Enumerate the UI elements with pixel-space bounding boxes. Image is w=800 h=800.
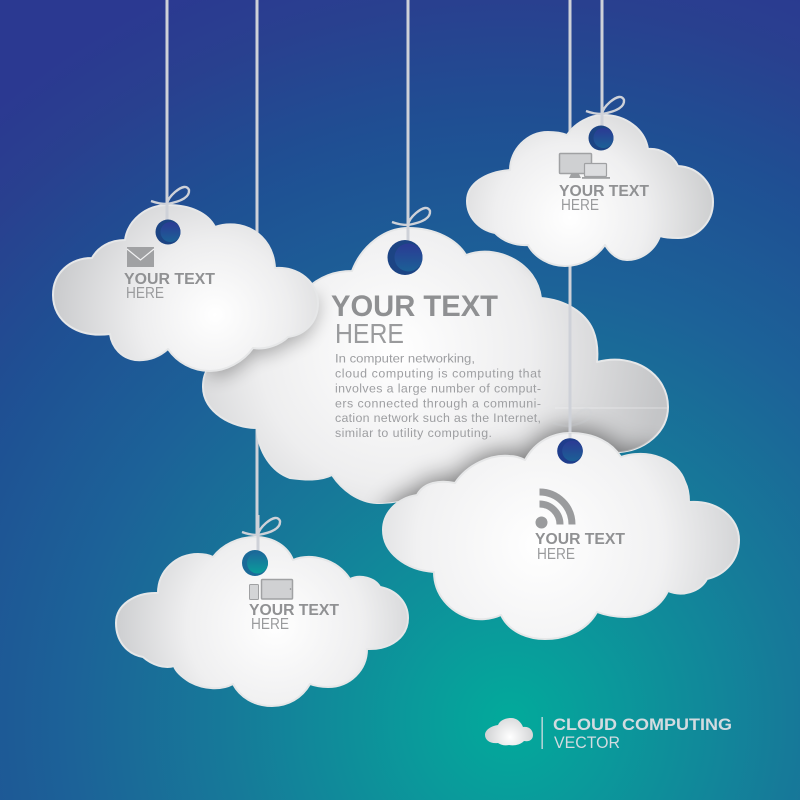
faint bow behind wifi cloud <box>553 409 591 426</box>
mobile cloud heading: YOUR TEXT <box>249 602 339 619</box>
logo: cloud computing vector <box>485 715 732 752</box>
icon: small logo cloud <box>485 718 533 745</box>
mail cloud hole <box>156 220 180 244</box>
mail cloud bow <box>151 187 189 204</box>
central cloud string <box>406 0 410 240</box>
logo subtitle: VECTOR <box>554 733 620 752</box>
panel: top-left mail cloud <box>53 0 318 371</box>
central subheading: HERE <box>335 318 404 349</box>
devices cloud string <box>600 0 604 128</box>
mobile cloud bow <box>242 518 280 535</box>
string passing over central cloud <box>568 0 572 440</box>
mail cloud heading: YOUR TEXT <box>124 271 215 288</box>
mail cloud shape <box>53 205 318 371</box>
panel: central cloud <box>202 0 669 504</box>
central body text <box>335 352 542 440</box>
central body text: similar to utility computing. <box>335 426 492 440</box>
devices cloud hole <box>588 126 614 150</box>
wifi cloud hole <box>557 438 583 464</box>
logo divider <box>542 717 543 749</box>
panel: right wifi cloud <box>383 433 739 639</box>
logo title: CLOUD COMPUTING <box>553 715 732 734</box>
devices cloud subheading: HERE <box>561 197 599 214</box>
central cloud hole <box>388 240 422 275</box>
icon: monitor and laptop <box>560 154 610 179</box>
icon: envelope <box>127 247 154 267</box>
central heading: YOUR TEXT <box>331 290 498 323</box>
central cloud shape <box>203 228 668 503</box>
panel: bottom-left mobile cloud <box>116 515 408 706</box>
wifi cloud string tip <box>568 433 572 441</box>
wifi cloud heading: YOUR TEXT <box>535 531 625 548</box>
central body text: cloud computing is computing that <box>335 366 542 380</box>
devices cloud shape <box>467 115 713 266</box>
hanging string behind clouds <box>256 0 258 552</box>
panel: top-right devices cloud <box>467 0 713 266</box>
central body text: involves a large number of comput- <box>335 382 541 396</box>
mobile cloud shape <box>116 537 408 706</box>
shadows cast on central cloud <box>200 207 739 608</box>
mobile cloud hole <box>242 550 268 576</box>
devices cloud heading: YOUR TEXT <box>559 183 649 200</box>
wifi cloud shape <box>383 433 739 639</box>
mail cloud string <box>166 0 168 220</box>
mobile cloud subheading: HERE <box>251 616 289 633</box>
central body text: cation network such as the Internet, <box>335 411 541 425</box>
mobile cloud string <box>256 515 260 552</box>
icon: wifi signal <box>536 492 572 528</box>
central body text: In computer networking, <box>335 352 475 366</box>
central cloud bow <box>392 208 430 225</box>
devices cloud bow <box>586 97 624 114</box>
mail cloud subheading: HERE <box>126 285 164 302</box>
central cloud faint horizontal crease <box>555 407 667 409</box>
wifi cloud subheading: HERE <box>537 546 575 563</box>
icon: phone and tablet <box>250 580 292 600</box>
central body text: ers connected through a communi- <box>335 396 541 410</box>
